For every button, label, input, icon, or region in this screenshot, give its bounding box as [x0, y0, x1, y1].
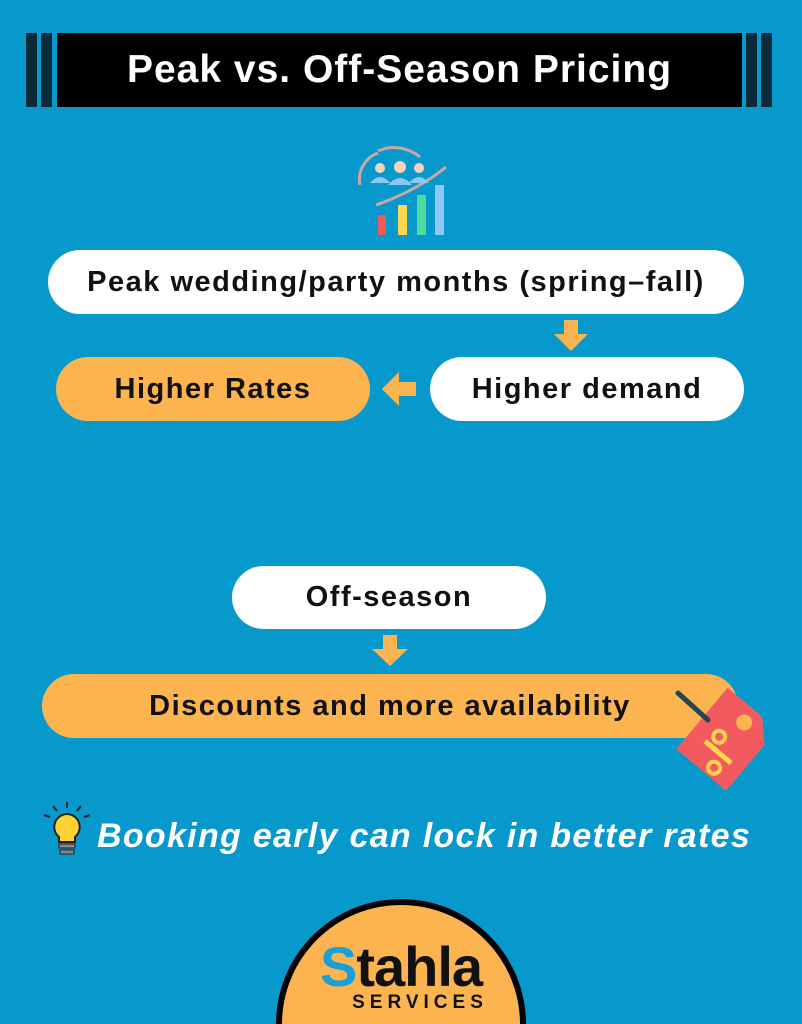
icon: discount tag: [676, 688, 765, 791]
arrow left: [382, 372, 416, 406]
pill: peak months: [48, 250, 744, 314]
pill: higher rates: Higher Rates: [115, 372, 311, 404]
logo: Stahla: [320, 935, 484, 998]
logo: [276, 899, 526, 1024]
pill: discounts: Discounts and more availability: [149, 690, 631, 722]
pill: off-season: [232, 566, 546, 629]
arrow down 1: [554, 320, 588, 351]
pill: peak months: Peak wedding/party months (spring–fall): [87, 266, 705, 298]
tip text: Booking early can lock in better rates: [97, 817, 751, 855]
icon: light bulb: [44, 802, 90, 854]
pill: discounts: [42, 674, 738, 738]
pill: higher demand: [430, 357, 744, 421]
title bar: Peak vs. Off-Season Pricing: [127, 48, 672, 91]
icon: growth chart: [358, 146, 447, 235]
title bar: [26, 33, 772, 107]
logo: SERVICES: [352, 992, 488, 1013]
pill: higher rates: [56, 357, 370, 421]
arrow down 2: [372, 635, 408, 666]
pill: higher demand: Higher demand: [472, 372, 702, 404]
pill: off-season: Off-season: [306, 581, 472, 613]
